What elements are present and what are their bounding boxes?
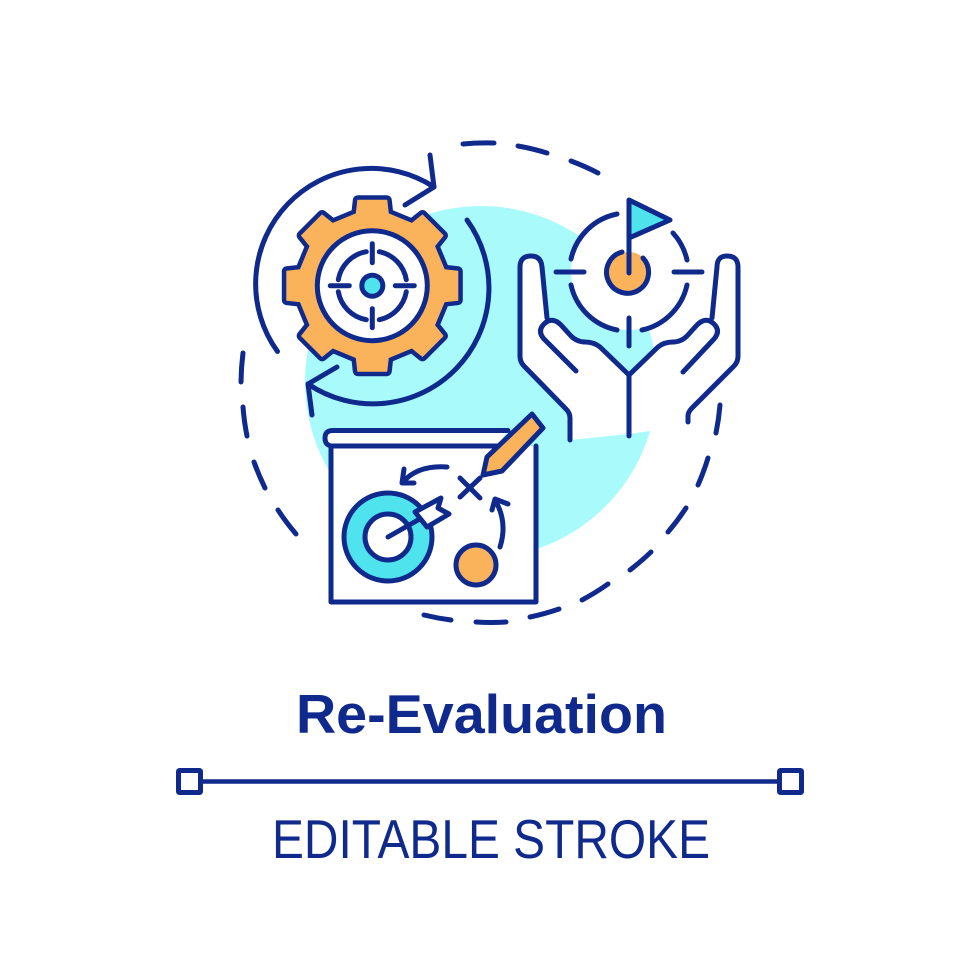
icon: gear with circular arrows (256, 155, 489, 415)
board panel (331, 446, 536, 602)
subtitle: EDITABLE STROKE (272, 808, 710, 870)
circular arrow: top (256, 155, 434, 352)
icon: background cyan circle (305, 206, 657, 558)
flag (629, 200, 670, 273)
gear (287, 200, 458, 371)
x mark (460, 478, 480, 498)
white hand silhouette (520, 256, 738, 440)
left hand (520, 256, 629, 440)
title: Re-Evaluation (296, 683, 667, 745)
circular arrow: bottom (308, 220, 489, 415)
board top roll (325, 430, 508, 446)
icon: hands holding target and flag (520, 200, 738, 440)
target crosshair (556, 214, 702, 346)
right hand (629, 256, 738, 436)
icon: strategy board (325, 414, 543, 602)
target with arrow (344, 493, 449, 581)
orange ball (456, 545, 496, 585)
curved arrow to x (492, 499, 508, 547)
curved arrow to target (402, 467, 447, 483)
divider with square handles (178, 770, 802, 792)
pencil (483, 414, 543, 475)
dashed outer circle (241, 143, 720, 622)
